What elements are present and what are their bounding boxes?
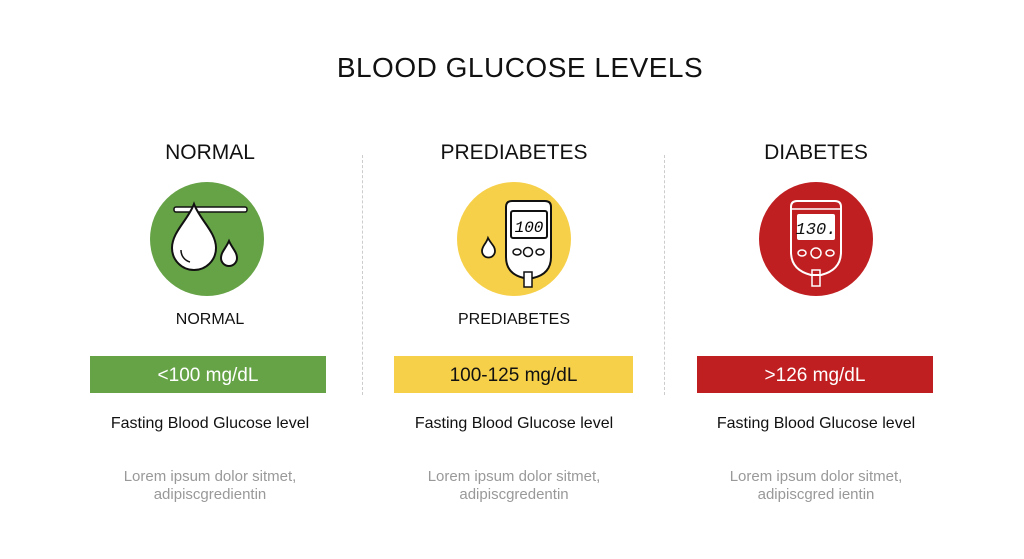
icon: drops xyxy=(150,182,264,296)
label: normal: NORMAL xyxy=(176,311,244,328)
panel: diabetes xyxy=(759,141,873,296)
text: lorem 2: adipiscgredentin xyxy=(459,486,569,503)
text: lorem 2 xyxy=(428,468,600,503)
icon: meter 100: 100 xyxy=(515,219,544,237)
text: lorem 1: Lorem ipsum dolor sitmet, xyxy=(124,468,296,485)
bar: normal xyxy=(90,356,326,393)
heading: normal: NORMAL xyxy=(165,141,255,164)
bar: diabetes: >126 mg/dL xyxy=(765,365,865,386)
label: prediabetes: PREDIABETES xyxy=(458,311,570,328)
text: lorem 3: Lorem ipsum dolor sitmet, xyxy=(730,468,902,485)
icon: meter 100 xyxy=(457,182,571,296)
text: lorem 1 xyxy=(124,468,296,503)
title: BLOOD GLUCOSE LEVELS xyxy=(337,52,703,83)
bar: prediabetes xyxy=(394,356,633,393)
text: lorem 2: Lorem ipsum dolor sitmet, xyxy=(428,468,600,485)
icon: meter 130 xyxy=(759,182,873,296)
text: lorem 3: adipiscgred ientin xyxy=(758,486,874,503)
text: fasting 2: Fasting Blood Glucose level xyxy=(415,415,613,432)
text: fasting 1: Fasting Blood Glucose level xyxy=(111,415,309,432)
panel: prediabetes xyxy=(440,141,588,328)
heading: prediabetes: PREDIABETES xyxy=(440,141,588,164)
panel: normal xyxy=(150,141,264,328)
icon: meter 130: 130. xyxy=(796,221,836,240)
bar: diabetes xyxy=(697,356,933,393)
bar: prediabetes: 100-125 mg/dL xyxy=(450,365,577,386)
text: lorem 1: adipiscgredientin xyxy=(154,486,266,503)
text: fasting 3: Fasting Blood Glucose level xyxy=(717,415,915,432)
text: lorem 3 xyxy=(730,468,902,503)
heading: diabetes: DIABETES xyxy=(764,141,868,164)
bar: normal: <100 mg/dL xyxy=(158,365,258,386)
